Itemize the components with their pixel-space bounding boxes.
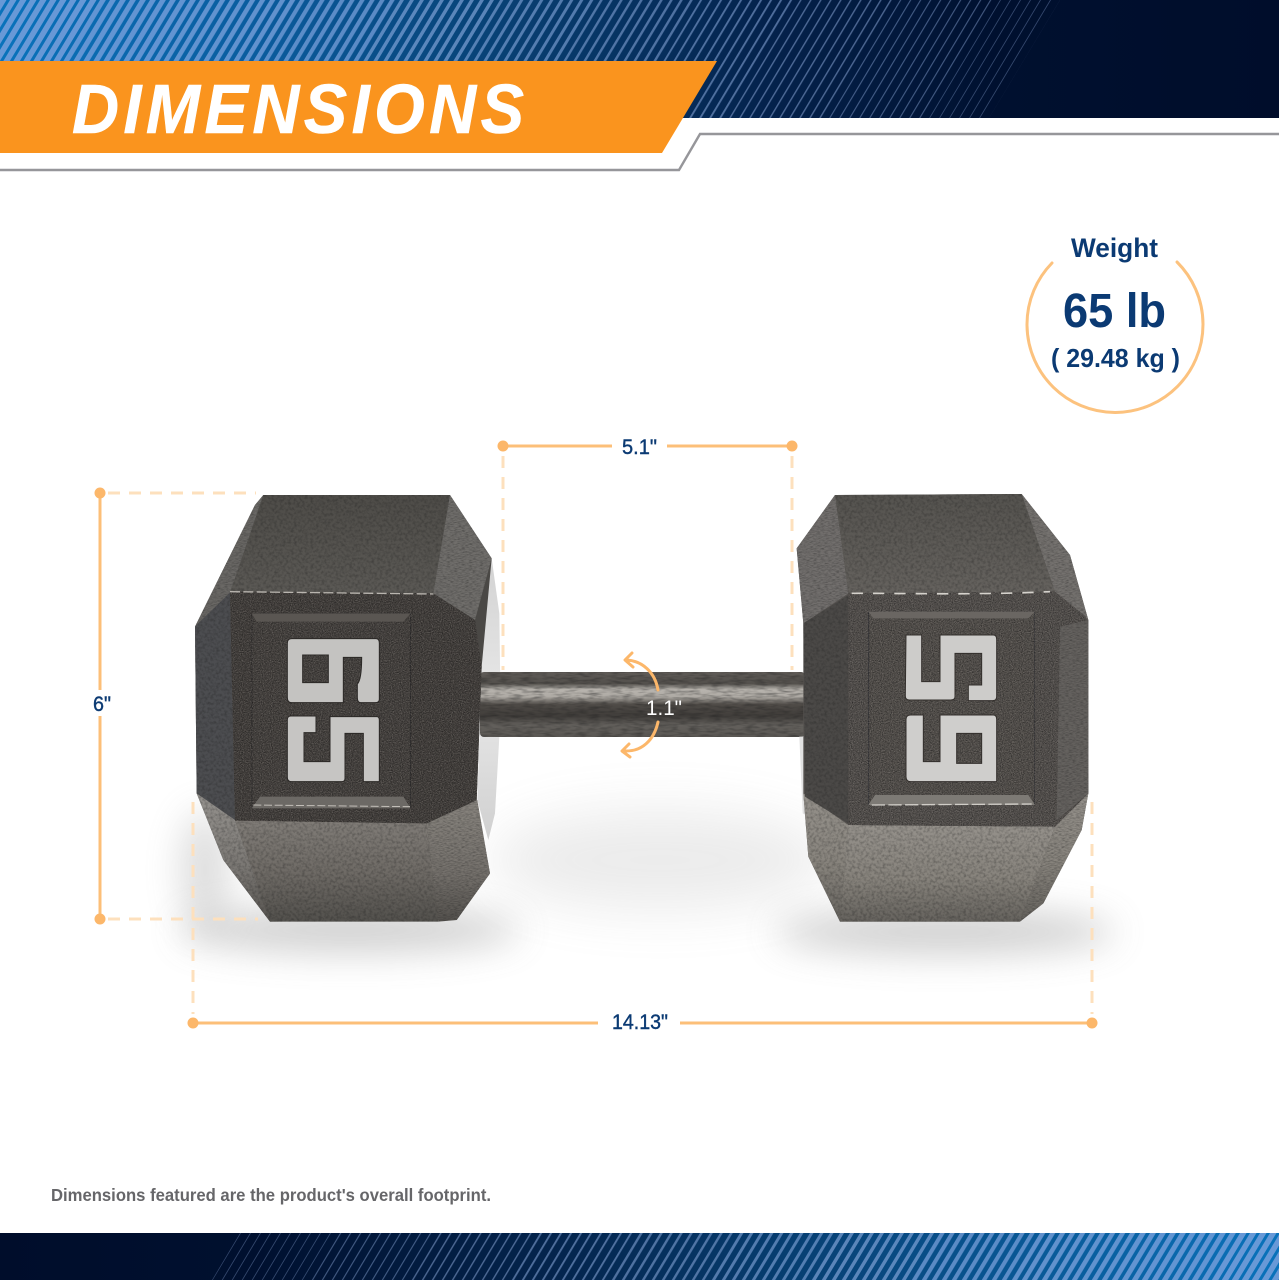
weight badge: Weight [1071,233,1158,263]
digit 6 rotated [287,639,379,703]
right hex head with 65 [797,494,1088,922]
footnote: Dimensions featured are the product's overall footprint. [51,1185,491,1205]
digit 5 rotated [287,716,379,782]
arrow: bottom curved [622,722,658,757]
dumbbell [195,494,1088,922]
dimension: handle length 5.1 inch [498,436,798,670]
dumbbell handle [480,672,805,737]
back face seen behind left head [475,558,501,840]
weight badge: ( 29.48 kg ) [1051,343,1180,373]
arrow: top curved [625,653,658,690]
left hex head with 65 [195,495,492,922]
weight badge: 65 lb [1063,285,1166,338]
weight badge [1027,233,1203,412]
dimension: handle length 5.1 inch: 5.1" [622,436,657,459]
title banner: DIMENSIONS [72,71,524,149]
footer gradient band [0,1233,1279,1280]
dimension: handle diameter 1.1 inch with arrows [622,653,682,757]
header white step with gray rule [0,134,1279,170]
title banner [0,61,717,153]
dimension: total length 14.13 inch: 14.13" [612,1011,668,1034]
dimension: head height 6 inch [93,488,258,924]
dumbbell shadow [180,810,1115,954]
dimension: head height 6 inch: 6" [93,693,111,716]
digit 5 rotated [905,635,997,701]
dimension: handle diameter 1.1 inch with arrows: 1.1" [646,697,682,720]
digit 6 rotated [906,715,997,782]
dimension: total length 14.13 inch [188,802,1098,1034]
header gradient band [0,0,1279,118]
